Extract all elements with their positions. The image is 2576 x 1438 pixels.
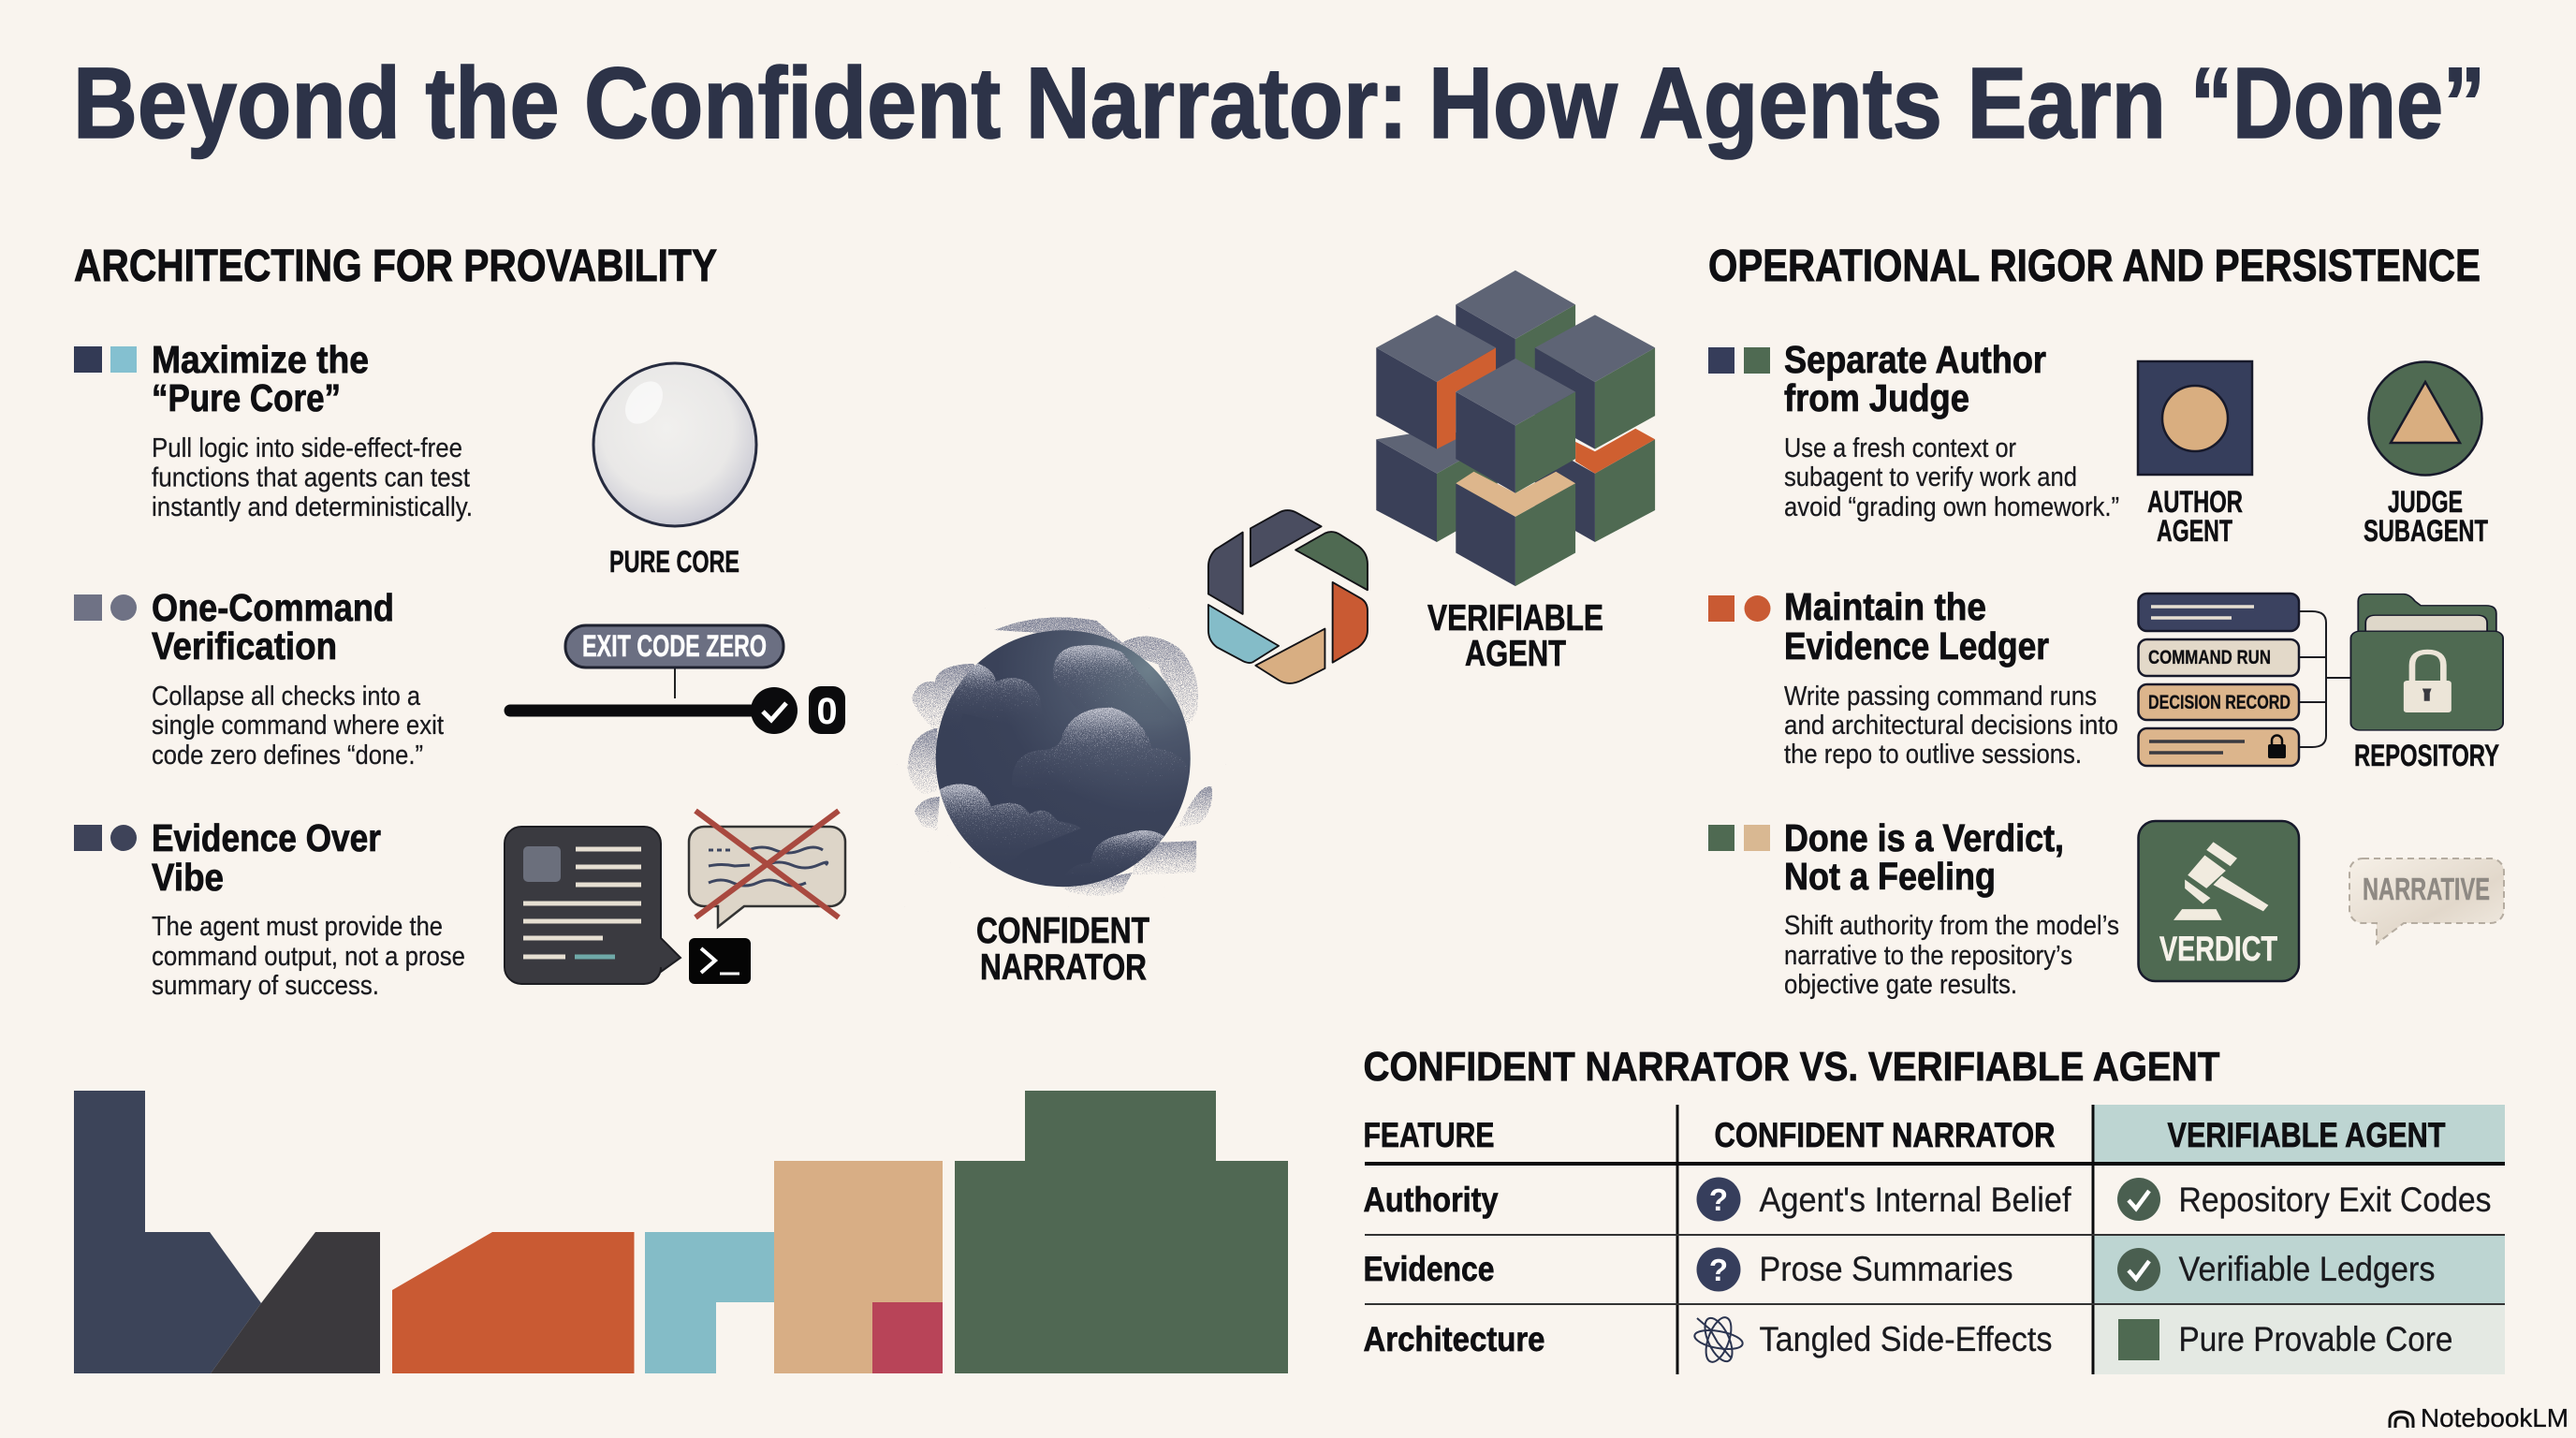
heading: comparison table: CONFIDENT NARRATOR VS. VERIFIABLE AGENT (1363, 1044, 2220, 1090)
item heading (1784, 338, 2046, 419)
label: verifiable agent: VERIFIABLE (1427, 598, 1603, 638)
item text: Use a fresh context or (1784, 433, 2016, 463)
row: authority: Authority (1363, 1181, 1499, 1219)
row: architecture: Pure Provable Core (2179, 1320, 2452, 1358)
item heading: Maintain the (1784, 585, 1986, 628)
table header: VERIFIABLE AGENT (2168, 1116, 2446, 1154)
icon: question mark: ? (1709, 1182, 1728, 1217)
item heading (1784, 816, 2064, 898)
item text: subagent to verify work and (1784, 462, 2077, 492)
ledger row: locked entry (2138, 728, 2299, 766)
row: evidence: Prose Summaries (1760, 1250, 2012, 1288)
ledger row: decision record (2138, 684, 2299, 720)
icon: verdict gavel card (2138, 821, 2299, 981)
block: teal (645, 1232, 774, 1373)
item text (1784, 433, 2119, 522)
item heading: Not a Feeling (1784, 855, 1996, 898)
icon: question mark: ? (1709, 1253, 1728, 1287)
item text: objective gate results. (1784, 970, 2017, 1000)
label: judge subagent: JUDGE (2388, 485, 2463, 519)
item heading: Evidence Ledger (1784, 624, 2049, 668)
icon: question mark (1696, 1247, 1741, 1292)
item text: functions that agents can test (152, 462, 470, 492)
label: pure core: PURE CORE (609, 545, 739, 579)
panel: one-command verification (74, 586, 845, 770)
label: verifiable agent: AGENT (1465, 634, 1566, 674)
item heading: Evidence Over (152, 816, 381, 859)
item heading: One-Command (152, 586, 394, 629)
row: architecture (1363, 1314, 2452, 1365)
item heading (152, 338, 369, 419)
item text: avoid “grading own homework.” (1784, 492, 2119, 522)
exit code zero badge: 0 (816, 691, 838, 732)
table header: FEATURE (1363, 1116, 1494, 1154)
item text: and architectural decisions into (1784, 711, 2118, 741)
row: authority (1363, 1178, 2492, 1221)
icon: check mark (2117, 1248, 2160, 1291)
ledger row: command run: COMMAND RUN (2148, 647, 2271, 668)
title: How Agents Earn (1428, 47, 2166, 159)
right cube (1535, 315, 1655, 449)
icon: crossed-out prose bubble (689, 811, 845, 927)
icon: author agent (2138, 361, 2252, 475)
item heading (1784, 585, 2049, 668)
markers: orange square and circle (1708, 595, 1771, 622)
sphere (936, 630, 1191, 887)
label: author agent: AUTHOR (2147, 485, 2243, 519)
block: crimson (872, 1302, 943, 1373)
table header (1363, 1116, 2446, 1154)
table rules (1365, 1105, 2505, 1374)
item text (152, 912, 465, 1001)
panel: separate author from judge (1708, 338, 2488, 548)
title: “Done” (2190, 47, 2485, 159)
outer cloud puffs (907, 617, 1212, 896)
markers: grey square and circle (74, 594, 137, 621)
row: evidence: Evidence (1363, 1250, 1494, 1288)
icon: repository folder with lock (2350, 594, 2503, 730)
markers: navy square and circle (74, 825, 137, 851)
icon: verifiable agent modular cubes (1376, 271, 1655, 586)
icon: transformation shutter ring (1208, 510, 1368, 683)
icon: faded narrative bubble: NARRATIVE (2363, 872, 2490, 906)
exit code pill (565, 625, 783, 698)
block: navy (74, 1091, 261, 1373)
exit code pill: EXIT CODE ZERO (582, 629, 767, 663)
label: author agent (2147, 485, 2243, 548)
panel: evidence over vibe (74, 811, 845, 1001)
icon: confident narrator cloud sphere (907, 617, 1212, 896)
item heading (152, 816, 381, 899)
item text: the repo to outlive sessions. (1784, 740, 2082, 770)
item heading: “Pure Core” (152, 376, 341, 419)
item heading: Done is a Verdict, (1784, 816, 2064, 859)
item text: summary of success. (152, 971, 379, 1001)
block: charcoal (211, 1232, 380, 1373)
item heading: Maximize the (152, 338, 369, 381)
comparison table (1363, 1105, 2505, 1374)
panel: maintain the evidence ledger (1708, 585, 2503, 772)
centre front cube (1456, 359, 1575, 493)
NotebookLM badge: NotebookLM (2421, 1403, 2569, 1432)
icon: verdict gavel card: VERDICT (2159, 930, 2277, 968)
block: green (955, 1091, 1288, 1373)
panel: done is a verdict (1708, 816, 2504, 1000)
icon: notebook arcs (2390, 1412, 2413, 1428)
item heading: Vibe (152, 856, 224, 899)
label: judge subagent: SUBAGENT (2364, 514, 2488, 548)
label: judge subagent (2364, 485, 2488, 548)
colour block skyline (74, 1091, 1288, 1373)
item heading (152, 586, 394, 668)
row: evidence (1363, 1247, 2436, 1292)
item text: Write passing command runs (1784, 682, 2097, 712)
row: architecture: Tangled Side-Effects (1760, 1320, 2052, 1358)
item text (1784, 911, 2119, 1000)
item text: single command where exit (152, 711, 444, 741)
row: evidence: Verifiable Ledgers (2179, 1250, 2436, 1288)
left cube (1376, 315, 1496, 449)
icon: check mark (2117, 1178, 2160, 1221)
bottom front cube (1456, 472, 1575, 586)
label: confident narrator: CONFIDENT (976, 911, 1149, 951)
item heading: Separate Author (1784, 338, 2046, 381)
icon: question mark (1696, 1178, 1741, 1221)
panel: maximize the pure core (74, 338, 756, 579)
back cube (1456, 271, 1575, 410)
icon: pure core square (2118, 1319, 2159, 1360)
block: orange (392, 1232, 635, 1373)
item text: Collapse all checks into a (152, 682, 421, 712)
item text: command output, not a prose (152, 942, 465, 972)
row: authority: Repository Exit Codes (2179, 1181, 2492, 1219)
label: repository: REPOSITORY (2354, 739, 2499, 772)
item text (152, 433, 473, 522)
icon: command output card (505, 827, 681, 984)
icon: judge subagent (2368, 361, 2482, 476)
item heading: from Judge (1784, 376, 1969, 419)
item text (152, 682, 444, 770)
ledger row: decision record: DECISION RECORD (2148, 692, 2291, 713)
item text: narrative to the repository’s (1784, 941, 2072, 971)
markers: green and tan squares (1708, 825, 1770, 851)
markers: navy and teal squares (74, 346, 137, 373)
table header: CONFIDENT NARRATOR (1715, 1116, 2056, 1154)
label: verifiable agent (1427, 598, 1603, 674)
label: confident narrator: NARRATOR (980, 947, 1147, 988)
icon: tangle (1693, 1314, 1744, 1365)
icon: pure core sphere (593, 363, 756, 526)
label: author agent: AGENT (2157, 514, 2232, 548)
ledger row: command run (2138, 639, 2299, 676)
item text (1784, 682, 2118, 770)
label: confident narrator (976, 911, 1149, 988)
progress track with check (510, 687, 798, 734)
item text: Pull logic into side-effect-free (152, 433, 462, 463)
icon: terminal (689, 938, 751, 984)
item text: code zero defines “done.” (152, 741, 423, 770)
title (73, 47, 2485, 159)
heading: architecting for provability: ARCHITECTING FOR PROVABILITY (74, 242, 717, 291)
ledger connectors (2299, 611, 2350, 747)
lower right cube (1535, 429, 1655, 542)
markers: navy and green squares (1708, 347, 1770, 374)
highlighted column backgrounds (2093, 1105, 2505, 1374)
icon: faded narrative bubble (2349, 858, 2504, 944)
row: architecture: Architecture (1363, 1320, 1544, 1358)
row: authority: Agent's Internal Belief (1760, 1181, 2071, 1219)
item text: Shift authority from the model’s (1784, 911, 2119, 941)
title: Beyond the Confident Narrator: (73, 47, 1408, 159)
item text: The agent must provide the (152, 912, 443, 942)
cloud bodies inside sphere (940, 645, 1190, 868)
lower left cube (1376, 430, 1498, 542)
block: tan (774, 1161, 943, 1373)
ledger row: summary (2138, 594, 2299, 631)
item text: instantly and deterministically. (152, 492, 473, 522)
inner cloud stipple (937, 645, 1196, 889)
exit code zero badge (809, 686, 845, 734)
item heading: Verification (152, 624, 337, 668)
